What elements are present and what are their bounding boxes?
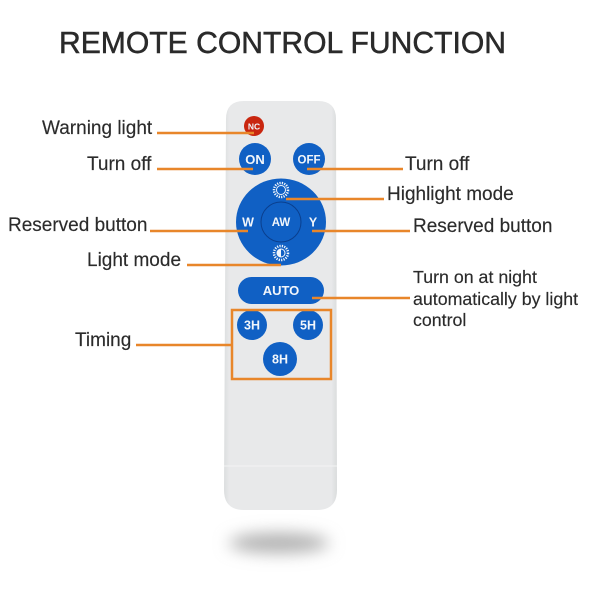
button: NC warning light: NC xyxy=(248,122,260,132)
button: 8H xyxy=(263,342,297,376)
button: 5H: 5H xyxy=(300,318,316,332)
label: reserved button right: Reserved button xyxy=(413,216,552,237)
label: turn off right: Turn off xyxy=(405,154,470,175)
remote control body xyxy=(224,101,337,510)
button: OFF: OFF xyxy=(298,154,320,166)
leader lines xyxy=(136,133,410,345)
button: 3H xyxy=(237,310,267,340)
directional pad: AW xyxy=(272,217,290,229)
button: 3H: 3H xyxy=(244,318,260,332)
directional pad: Y xyxy=(309,216,318,230)
label: auto description: Turn on at night xyxy=(413,267,537,287)
directional pad xyxy=(236,178,326,266)
title: REMOTE CONTROL FUNCTION xyxy=(59,26,506,60)
button: OFF xyxy=(293,143,325,175)
label: timing: Timing xyxy=(75,330,131,351)
button: AUTO: AUTO xyxy=(263,283,299,298)
label: turn off left: Turn off xyxy=(87,154,152,175)
remote shadow xyxy=(229,533,329,553)
button: 8H: 8H xyxy=(272,352,288,366)
icon: light mode half sun xyxy=(274,246,288,260)
button: ON: ON xyxy=(245,152,265,167)
icon: highlight sun xyxy=(274,183,288,197)
label: reserved button left: Reserved button xyxy=(8,215,147,236)
button: AUTO xyxy=(238,277,324,304)
label: highlight mode: Highlight mode xyxy=(387,184,514,205)
timing highlight box xyxy=(232,310,331,379)
button: ON xyxy=(239,143,271,175)
button: NC warning light xyxy=(244,116,264,136)
label: light mode: Light mode xyxy=(87,250,181,271)
label: auto description xyxy=(413,267,578,330)
label: warning light: Warning light xyxy=(42,118,153,139)
label: auto description: automatically by light xyxy=(413,289,578,309)
label: auto description: control xyxy=(413,310,466,330)
button: 5H xyxy=(293,310,323,340)
directional pad: W xyxy=(242,216,254,230)
